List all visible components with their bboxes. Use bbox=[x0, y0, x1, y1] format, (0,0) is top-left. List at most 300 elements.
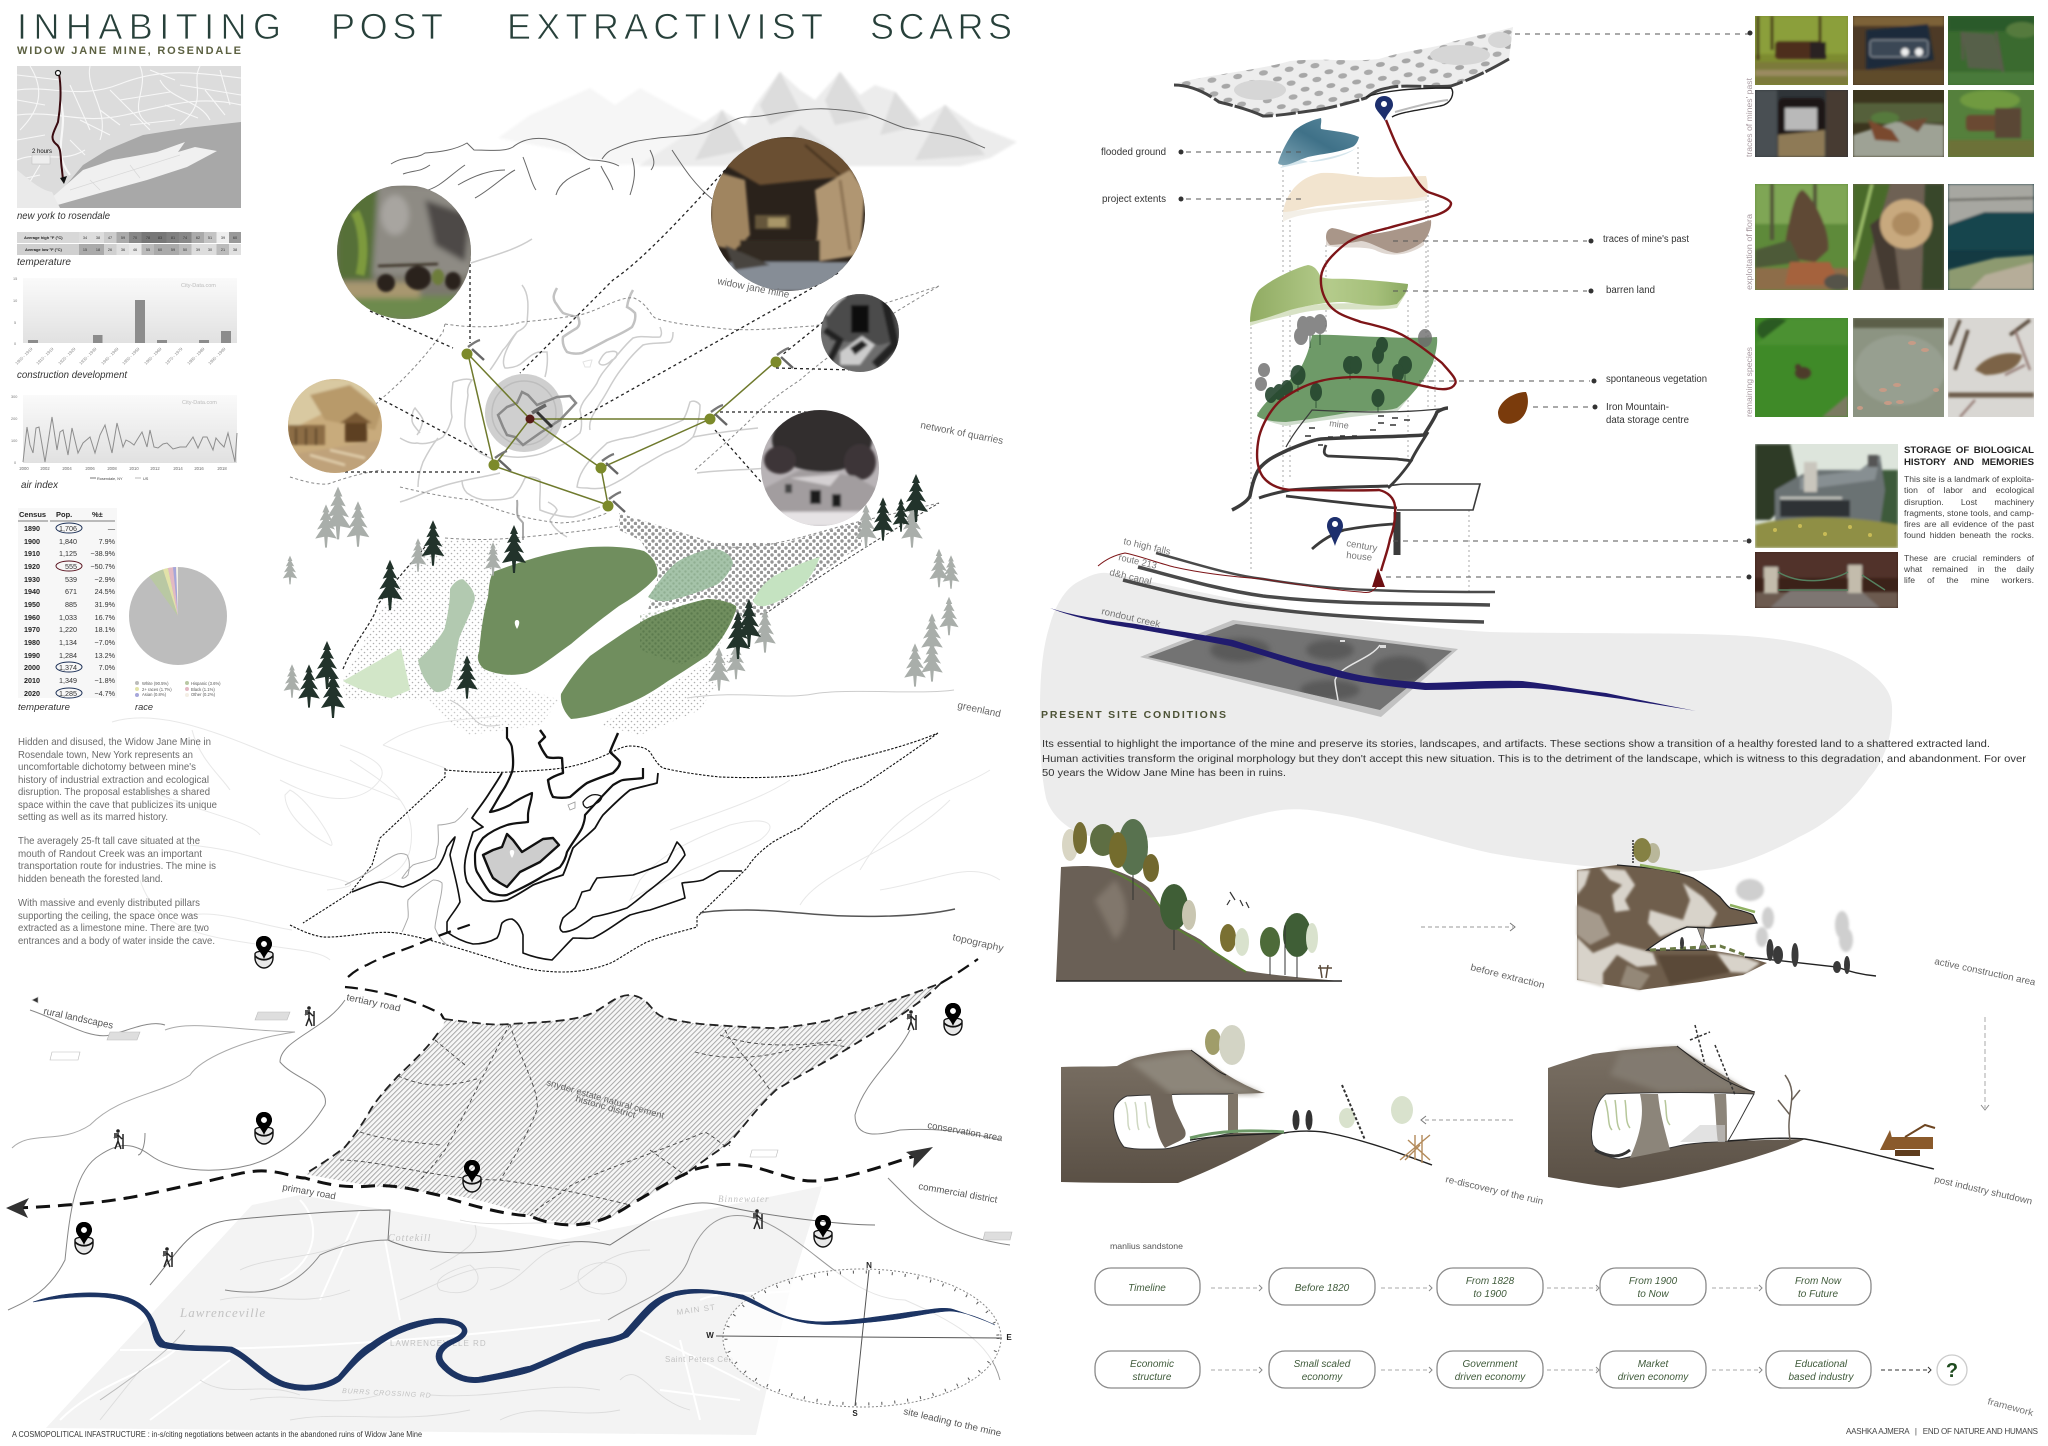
table: census population: 1890 bbox=[24, 524, 40, 533]
panel: temperature table: 60 bbox=[233, 236, 237, 240]
text block: present site conditions body: Human activities transform the original morphology but they don't accept this new situation. This is to the detriment of the landscape, which is witness to this degradation, and abandonment. For over bbox=[1042, 753, 2027, 765]
flowchart: economic structure: Educational bbox=[1795, 1359, 1848, 1370]
photo 11 bbox=[1853, 318, 1945, 417]
label: iron mountain bbox=[1533, 402, 1689, 426]
chart: air index: 2004 bbox=[62, 466, 72, 471]
exploded axonometric: vertical dotted guides bbox=[1251, 147, 1469, 592]
table: census population: 1,220 bbox=[59, 625, 77, 634]
chart: air index: 300 bbox=[11, 395, 17, 399]
trees bbox=[1255, 314, 1432, 412]
chart: race pie: Hispanic (3.6%) bbox=[191, 681, 221, 686]
table: census population: 16.7% bbox=[95, 613, 116, 622]
chart: race pie bbox=[129, 567, 227, 697]
icon: blue pin top bbox=[1375, 96, 1393, 121]
text block: introduction: space within the cave that publicizes its unique bbox=[18, 800, 217, 811]
table: census population: 885 bbox=[65, 600, 77, 609]
question mark node bbox=[1937, 1355, 1967, 1385]
title: EXTRACTIVIST bbox=[507, 6, 823, 47]
pale rock mottling bbox=[1577, 868, 1760, 987]
panel: temperature table: Average low °F (°C) bbox=[25, 247, 63, 252]
photo 1 bbox=[1755, 16, 1848, 85]
road labels: d&h canal bbox=[1108, 567, 1153, 588]
panel: temperature table: 78 bbox=[146, 236, 150, 240]
illustration: stippled forest band bbox=[343, 503, 939, 735]
label: spontaneous vegetation: spontaneous vegetation bbox=[1606, 374, 1707, 385]
photo 2 bbox=[1853, 16, 1944, 85]
panel: temperature table: 18 bbox=[96, 248, 100, 252]
construction caption: construction development bbox=[17, 369, 128, 381]
chart: construction development: City-Data.com bbox=[181, 283, 216, 289]
table: census population: 539 bbox=[65, 575, 77, 584]
photo 3 bbox=[1948, 16, 2038, 85]
section: re-discovery of the ruin bbox=[1061, 1025, 1432, 1183]
panel: temperature table: 62 bbox=[196, 236, 200, 240]
flowchart: timeline: From Now bbox=[1795, 1276, 1842, 1287]
flowchart: timeline: From 1900 bbox=[1629, 1276, 1678, 1287]
road labels bbox=[1100, 536, 1378, 630]
table: census population: 1910 bbox=[24, 549, 40, 558]
layer: rondout creek bbox=[1050, 608, 1696, 711]
heading: present site conditions: PRESENT SITE CONDITIONS bbox=[1041, 709, 1226, 721]
greenland baseline lines bbox=[450, 690, 954, 726]
panel: temperature table: 59 bbox=[121, 236, 125, 240]
panel: temperature table: 34 bbox=[83, 236, 87, 240]
illustration: street map base bbox=[46, 1186, 822, 1435]
label: primary road: primary road bbox=[281, 1182, 337, 1202]
flowchart: economic structure: driven economy bbox=[1618, 1372, 1689, 1383]
chart: air index: 2002 bbox=[40, 466, 50, 471]
text block: storage of biological history and memories: fires are all evidence of the past bbox=[1904, 519, 2034, 529]
photo grid: traces of mines' past bbox=[1755, 16, 2038, 157]
label: commercial district: commercial district bbox=[917, 1181, 999, 1206]
panel: temperature table: 21 bbox=[221, 248, 225, 252]
table: census population: 1920 bbox=[24, 562, 40, 571]
text block: introduction bbox=[18, 737, 217, 947]
panel: temperature table: Average high °F (°C) bbox=[24, 235, 63, 240]
illustration: river bbox=[33, 1289, 995, 1390]
text block: introduction: The averagely 25-ft tall cave situated at the bbox=[18, 836, 200, 847]
flowchart: economic structure: Small scaled bbox=[1294, 1359, 1351, 1370]
rubble and grass bbox=[1650, 946, 1745, 955]
mine field marks: mine bbox=[1329, 418, 1349, 431]
chart: air index: 100 bbox=[11, 439, 17, 443]
panel: temperature table: 83 bbox=[158, 236, 162, 240]
flowchart: timeline: Before 1820 bbox=[1295, 1283, 1350, 1294]
photo: mine interior bbox=[711, 137, 865, 291]
long island bbox=[54, 142, 217, 205]
table: census population: 13.2% bbox=[95, 651, 116, 660]
illustration: street map base: Binnewater bbox=[718, 1194, 770, 1204]
flowchart: timeline: to Future bbox=[1798, 1289, 1838, 1300]
icons: location pins bbox=[75, 936, 962, 1254]
table: census population: 7.0% bbox=[99, 663, 116, 672]
label: traces of mines' past: traces of mines' past bbox=[1744, 77, 1754, 157]
illustration: rural landscape parcels bbox=[32, 997, 1012, 1240]
chart: air index: 2014 bbox=[173, 466, 183, 471]
photo: century house bbox=[1755, 444, 1898, 548]
smoke bbox=[1736, 879, 1853, 952]
table: census population: 555 bbox=[65, 562, 77, 571]
chart: construction development: 1940 - 1949 bbox=[100, 346, 120, 366]
illustration: street map base: BURRS CROSSING RD bbox=[342, 1388, 432, 1400]
illustration: compass: W bbox=[706, 1331, 714, 1340]
illustration: hatched historic district bbox=[305, 983, 941, 1224]
layer: mine roads bbox=[1232, 408, 1480, 555]
table: census population: 1,284 bbox=[59, 651, 77, 660]
photo grid: remaining species bbox=[1755, 318, 2034, 417]
label: network of quarries: network of quarries bbox=[919, 420, 1004, 447]
icons: hikers bbox=[114, 1006, 916, 1267]
table: census population: — bbox=[108, 524, 116, 533]
temperature caption: temperature bbox=[17, 256, 71, 268]
panel: temperature table: 46 bbox=[133, 248, 137, 252]
layer: long roads bbox=[1123, 553, 1495, 622]
flowchart: economic structure: driven economy bbox=[1455, 1372, 1526, 1383]
subtitle: WIDOW JANE MINE, ROSENDALE bbox=[17, 45, 241, 57]
illustration: landscape trails bbox=[8, 1000, 1010, 1400]
label: re-discovery of the ruin: re-discovery of the ruin bbox=[1444, 1174, 1544, 1207]
arrow: to re-discovery bbox=[1421, 1116, 1515, 1124]
chart: construction development: 1920 - 1929 bbox=[57, 346, 77, 366]
text block: introduction: mouth of Randout Creek was an important bbox=[18, 849, 202, 860]
chart: air index: 2006 bbox=[85, 466, 95, 471]
illustration: hatched historic district: historic district bbox=[574, 1093, 637, 1120]
label: flooded ground: flooded ground bbox=[1101, 147, 1166, 158]
flowchart: economic structure: Economic bbox=[1130, 1359, 1174, 1370]
table: census population: 671 bbox=[65, 587, 77, 596]
illustration: compass: E bbox=[1006, 1333, 1012, 1342]
dotted grey boundaries bbox=[290, 286, 939, 547]
text block: introduction: setting as well as its marred history. bbox=[18, 812, 168, 823]
photo grid: exploitation of flora bbox=[1755, 184, 2034, 290]
chart: construction development: 1970 - 1979 bbox=[164, 346, 184, 366]
race caption: race bbox=[135, 702, 153, 713]
chart: air index: Rosendale, NY bbox=[97, 477, 123, 481]
flowchart: economic structure bbox=[1095, 1351, 1967, 1388]
illustration: street map base: LAWRENCEVILLE RD bbox=[390, 1339, 487, 1348]
quarry nodes bbox=[462, 340, 793, 512]
table: census population: Pop. bbox=[56, 510, 72, 519]
table: census population: −4.7% bbox=[94, 689, 116, 698]
label: framework: framework bbox=[1986, 1396, 2035, 1419]
table: census population: Census bbox=[19, 510, 46, 519]
label: traces of mine's past: traces of mine's past bbox=[1603, 234, 1689, 245]
label: active construction area: active construction area bbox=[1933, 956, 2037, 988]
text block: storage of biological history and memories: what remained in the daily bbox=[1904, 564, 2034, 574]
chart: air index: 2018 bbox=[217, 466, 227, 471]
table: census population bbox=[18, 508, 117, 698]
flowchart: timeline bbox=[1095, 1268, 1871, 1305]
label: tertiary road: tertiary road bbox=[345, 992, 401, 1014]
table: census population: 1,285 bbox=[59, 689, 77, 698]
table: census population: 1,033 bbox=[59, 613, 77, 622]
chart: construction development: 5 bbox=[14, 321, 16, 325]
route: red path bbox=[1098, 120, 1456, 593]
icon: blue pin century house bbox=[1327, 517, 1343, 546]
illustration: compass: N bbox=[866, 1261, 872, 1270]
illustration: street map base: Lawrenceville bbox=[179, 1305, 266, 1320]
dashed leader: century house bbox=[1393, 538, 1752, 544]
photo 12 bbox=[1948, 318, 2034, 417]
title: INHABITING bbox=[17, 6, 281, 47]
layer: flooded ground bbox=[1278, 118, 1359, 168]
text block: present site conditions body: 50 years the Widow Jane Mine has been in ruins. bbox=[1042, 767, 1286, 779]
layer: traces of mine's past bbox=[1326, 220, 1431, 255]
chart: construction development bbox=[13, 277, 237, 366]
footer left caption: A COSMOPOLITICAL INFASTRUCTURE : in-s/citing negotiations between actants in the abandoned ruins of Widow Jane Mine bbox=[12, 1430, 422, 1439]
label: greenland: greenland bbox=[956, 700, 1002, 720]
road labels: route 213 bbox=[1117, 552, 1158, 572]
flowchart: economic structure: Market bbox=[1638, 1359, 1670, 1370]
text block: introduction: entrances and a body of water inside the cave. bbox=[18, 936, 215, 947]
panel: temperature table: 26 bbox=[108, 248, 112, 252]
title bbox=[17, 6, 1012, 47]
chart: air index: 2012 bbox=[150, 466, 160, 471]
label: exploitation of flora: exploitation of flora bbox=[1744, 214, 1754, 290]
chart: air index: 2010 bbox=[129, 466, 139, 471]
footer right credit: AASHKA AJMERA | END OF NATURE AND HUMANS bbox=[1846, 1427, 2038, 1436]
table: census population: 1,125 bbox=[59, 549, 77, 558]
chart: race pie: Black (1.1%) bbox=[191, 687, 215, 692]
panel: map new york to rosendale bbox=[17, 66, 241, 208]
illustration: street map base: Saint Peters Cen bbox=[665, 1355, 733, 1364]
panel: temperature table: 55 bbox=[146, 248, 150, 252]
text block: storage of biological history and memories: life of the mine workers. bbox=[1904, 575, 2034, 585]
label: post industry shutdown: post industry shutdown bbox=[1933, 1174, 2033, 1207]
panel: temperature table: 59 bbox=[171, 248, 175, 252]
text block: storage of biological history and memories bbox=[1904, 445, 2034, 585]
label: iron mountain: data storage centre bbox=[1606, 415, 1689, 426]
panel: temperature table: 39 bbox=[221, 236, 225, 240]
district boundary bbox=[305, 983, 941, 1176]
chart: construction development: 1960 - 1969 bbox=[143, 346, 163, 366]
illustration: street map base: MAIN ST bbox=[676, 1303, 716, 1317]
layer: barren land bbox=[1250, 265, 1408, 326]
photo 10 bbox=[1755, 318, 1848, 417]
bold contours bbox=[352, 727, 742, 960]
label: spontaneous vegetation bbox=[1419, 374, 1707, 385]
text block: introduction: extracted as a limestone mine. There are two bbox=[18, 923, 209, 934]
pale landscape lines behind intro text bbox=[112, 716, 1000, 960]
table: census population: 1,374 bbox=[59, 663, 77, 672]
chart: construction development: 1900 - 1919 bbox=[14, 346, 34, 366]
chart: air index: 0 bbox=[14, 461, 16, 465]
trees bbox=[1062, 819, 1332, 978]
table: census population: 18.1% bbox=[95, 625, 116, 634]
air index caption: air index bbox=[21, 479, 59, 491]
label: conservation area: conservation area bbox=[926, 1120, 1004, 1144]
chart: air index: 200 bbox=[11, 417, 17, 421]
illustration: compass: S bbox=[852, 1409, 858, 1418]
photo: kiln arches bbox=[337, 186, 471, 320]
chart: construction development: 1990 - 1999 bbox=[207, 346, 227, 366]
heading: storage: STORAGE OF BIOLOGICAL bbox=[1904, 445, 2034, 456]
label: flooded ground bbox=[1101, 147, 1301, 158]
chart: air index: City-Data.com bbox=[182, 400, 217, 406]
panel: grey background blob bbox=[1040, 573, 1892, 872]
flowchart: timeline: From 1828 bbox=[1466, 1276, 1515, 1287]
outlines bbox=[1617, 865, 1757, 950]
label: topography: topography bbox=[951, 932, 1004, 955]
table: census population: 1900 bbox=[24, 537, 40, 546]
photo 8 bbox=[1853, 184, 1944, 290]
arrow: to active construction bbox=[1421, 923, 1515, 931]
table: census population: −38.9% bbox=[90, 549, 116, 558]
section: active construction bbox=[1577, 838, 1876, 990]
primary road arrow bbox=[6, 1147, 933, 1225]
table: census population: 2020 bbox=[24, 689, 40, 698]
arrow: down bbox=[1981, 1017, 1989, 1110]
label: manlius sandstone: manlius sandstone bbox=[1110, 1241, 1183, 1251]
chart: construction development: 15 bbox=[13, 277, 17, 281]
table: census population: −7.0% bbox=[94, 638, 116, 647]
flowchart: economic structure: structure bbox=[1133, 1372, 1172, 1383]
road labels: rondout creek bbox=[1100, 606, 1162, 630]
flowchart: timeline: to 1900 bbox=[1473, 1289, 1507, 1300]
table: census population: 1930 bbox=[24, 575, 40, 584]
text block: storage of biological history and memories: These are crucial reminders of bbox=[1904, 553, 2034, 563]
label: project extents: project extents bbox=[1102, 194, 1166, 205]
table: census population: 1990 bbox=[24, 651, 40, 660]
table: census population: 1,134 bbox=[59, 638, 77, 647]
dashed leader: gate bbox=[1386, 574, 1752, 580]
dotted boundary bbox=[290, 733, 938, 972]
chart: air index: US bbox=[143, 477, 149, 481]
table: census population: 24.5% bbox=[95, 587, 116, 596]
panel: temperature table: 30 bbox=[208, 248, 212, 252]
text block: introduction: With massive and evenly distributed pillars bbox=[18, 898, 200, 909]
text block: present site conditions body: Its essential to highlight the importance of the mine and preserve its stories, landscapes, and artifacts. These sections show a transition of a healthy forested land to a shattered extracted land. bbox=[1042, 738, 1990, 750]
icon: red marker bbox=[1372, 568, 1385, 587]
illustration: street map base: Cottekill bbox=[388, 1233, 431, 1244]
title: SCARS bbox=[870, 6, 1012, 47]
panel: temperature table: 60 bbox=[158, 248, 162, 252]
section: post industry shutdown bbox=[1548, 1025, 1935, 1188]
chart: air index: 2008 bbox=[107, 466, 117, 471]
panel: temperature table: 47 bbox=[108, 236, 112, 240]
table: census population: 1940 bbox=[24, 587, 40, 596]
panel: temperature table: 74 bbox=[183, 236, 187, 240]
chart: race pie: Asian (0.8%) bbox=[142, 692, 167, 697]
layer: terrain with pillars bbox=[1174, 27, 1513, 118]
illustration: ridge lines bbox=[391, 109, 985, 199]
text block: introduction: hidden beneath the forested land. bbox=[18, 874, 163, 885]
panel: temperature table: 38 bbox=[233, 248, 237, 252]
flowchart: economic structure: based industry bbox=[1788, 1372, 1855, 1383]
photo: entrance gate bbox=[1755, 552, 1898, 608]
table: census population: 1,706 bbox=[59, 524, 77, 533]
illustration: compass bbox=[706, 1261, 1012, 1418]
flowchart: timeline: to Now bbox=[1637, 1289, 1669, 1300]
photo: tunnel black and white bbox=[821, 294, 899, 372]
question mark node: ? bbox=[1946, 1360, 1958, 1382]
flowchart: timeline: Timeline bbox=[1128, 1283, 1166, 1294]
panel: temperature table: 38 bbox=[96, 236, 100, 240]
panel: temperature table: 51 bbox=[208, 236, 212, 240]
table: census population: −50.7% bbox=[90, 562, 116, 571]
chart: construction development: 1950 - 1959 bbox=[121, 346, 141, 366]
label: before extraction: before extraction bbox=[1469, 962, 1546, 991]
ocean and sound bbox=[47, 122, 241, 208]
dashed leader: terrain bbox=[1515, 30, 1752, 36]
text block: present site conditions body bbox=[1042, 738, 2027, 779]
illustration: mountains bbox=[498, 72, 1017, 166]
table: census population: 7.9% bbox=[99, 537, 116, 546]
table: census population: 2000 bbox=[24, 663, 40, 672]
table: census population: 1,840 bbox=[59, 537, 77, 546]
photo 4 bbox=[1755, 90, 1848, 157]
illustration: network of quarries bbox=[345, 170, 855, 512]
table: census population: 1950 bbox=[24, 600, 40, 609]
chart: air index: 2016 bbox=[194, 466, 204, 471]
road labels: to high falls bbox=[1122, 536, 1172, 558]
text block: introduction: disruption. The proposal establishes a shared bbox=[18, 787, 210, 798]
table: census population: −1.8% bbox=[94, 676, 116, 685]
label: widow jane mine: widow jane mine bbox=[715, 276, 791, 301]
text block: storage of biological history and memories: HISTORY AND MEMORIES bbox=[1904, 457, 2034, 468]
layer: aerial plate bbox=[1140, 620, 1458, 717]
pillar bbox=[1697, 927, 1709, 949]
panel: temperature table: 15 bbox=[83, 248, 87, 252]
flowchart: economic structure: Government bbox=[1462, 1359, 1519, 1370]
panel: map new york to rosendale: 2 hours bbox=[32, 149, 52, 155]
panel: temperature table: 36 bbox=[121, 248, 125, 252]
text block: storage of biological history and memories: fragments, stone tools, and camp- bbox=[1904, 508, 2034, 518]
road labels: century bbox=[1345, 538, 1378, 554]
text block: introduction: Rosendale town, New York represents an bbox=[18, 750, 193, 761]
photo: sepia quarry bbox=[288, 379, 382, 473]
illustration: hatched historic district: snyder estate natural cement bbox=[545, 1077, 666, 1121]
photo: stone openings black and white bbox=[761, 408, 879, 526]
illustration: trees bbox=[283, 474, 959, 718]
label: site leading to the mine: site leading to the mine bbox=[902, 1406, 1002, 1439]
quarry links bbox=[468, 354, 775, 505]
text block: introduction: uncomfortable dichotomy between mine's bbox=[18, 762, 196, 773]
label: iron mountain: Iron Mountain- bbox=[1606, 402, 1669, 413]
chart: air index bbox=[11, 395, 237, 481]
label: traces of mine's past bbox=[1393, 234, 1689, 245]
section: before extraction bbox=[1056, 819, 1342, 981]
workers bbox=[1680, 937, 1850, 974]
photo 5 bbox=[1853, 90, 1944, 157]
tree bbox=[1646, 843, 1660, 863]
layer: spontaneous vegetation bbox=[1255, 314, 1437, 426]
text block: introduction: Hidden and disused, the Widow Jane Mine in bbox=[18, 737, 211, 748]
illustration: topography layer bbox=[290, 727, 955, 972]
chart: construction development: 0 bbox=[14, 342, 16, 346]
photo 9 bbox=[1948, 184, 2034, 290]
icon: iron mountain data centre bbox=[1498, 392, 1528, 424]
chart: construction development: 1910 - 1919 bbox=[35, 346, 55, 366]
title: POST bbox=[331, 6, 443, 47]
label: project extents bbox=[1102, 194, 1301, 205]
panel: temperature table: 50 bbox=[183, 248, 187, 252]
chart: race pie: Other (0.2%) bbox=[191, 692, 216, 697]
label: barren land bbox=[1393, 285, 1655, 296]
mine field marks bbox=[1305, 416, 1410, 445]
chart: construction development: 1980 - 1989 bbox=[186, 346, 206, 366]
road labels: house bbox=[1346, 550, 1373, 564]
label: rural landscapes: rural landscapes bbox=[42, 1006, 114, 1032]
table: census population: 1960 bbox=[24, 613, 40, 622]
chart: construction development: 10 bbox=[13, 299, 17, 303]
census caption: temperature bbox=[18, 702, 70, 713]
chart: race pie: 2+ races (1.7%) bbox=[142, 687, 172, 692]
panel: temperature table: 81 bbox=[171, 236, 175, 240]
table: census population: 31.9% bbox=[95, 600, 116, 609]
text block: introduction: transportation route for industries. The mine is bbox=[18, 861, 216, 872]
photo 7 bbox=[1755, 184, 1852, 290]
